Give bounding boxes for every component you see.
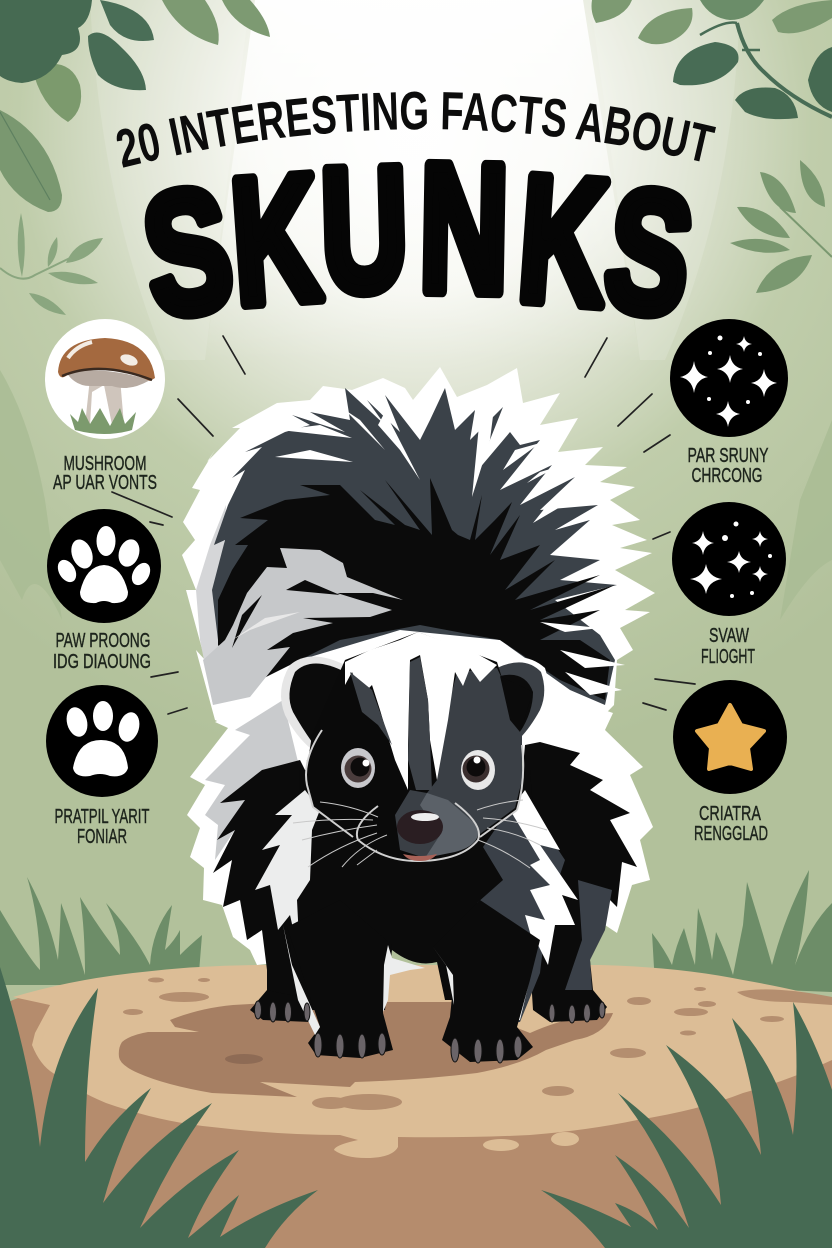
label: stars 1: CHRCONG: [692, 465, 762, 487]
head: ear join right: [500, 676, 533, 732]
body: white streak right: [510, 790, 578, 1020]
claws: [254, 1001, 605, 1063]
head: white crown and stripes: [345, 632, 497, 790]
grass: back left: [0, 877, 202, 985]
icon: stars 1: [670, 319, 788, 437]
label: mushroom: AP UAR VONTS: [53, 472, 157, 494]
tail: left grey edge: [196, 505, 232, 705]
legs: front right: [433, 900, 540, 1062]
label: paw 2: PRATPIL YARIT: [54, 806, 150, 828]
label: paw 2: FONIAR: [77, 826, 127, 848]
body: grey flank: [477, 800, 565, 1023]
head: face base: [305, 632, 523, 860]
label: paw 1: IDG DIAOUNG: [53, 651, 151, 673]
head: right eye: [461, 750, 495, 790]
head: nose and mouth: [397, 810, 443, 861]
label: paw 1: [53, 630, 151, 673]
head: left eye: [341, 748, 375, 788]
legs: front left: [287, 900, 393, 1058]
heading: SKUNKS: S: [133, 151, 243, 354]
label: stars 1: PAR SRUNY: [688, 445, 768, 467]
head: grey centre stripe: [408, 657, 432, 790]
connector lines: [112, 336, 695, 714]
body: white side fur right: [520, 690, 653, 967]
heading: SKUNKS: U: [319, 130, 410, 328]
body: left haunch black: [213, 760, 320, 1000]
head: muzzle ring and jaw: [306, 730, 523, 861]
icon: mushroom: [45, 319, 165, 439]
icon: paw 1: [47, 509, 161, 623]
grass: back right: [652, 870, 832, 992]
head: right grey face: [395, 668, 522, 858]
ground: [0, 965, 832, 1248]
heading: SKUNKS: S: [595, 150, 703, 353]
icon: star: [673, 680, 787, 794]
label: mushroom: [53, 453, 157, 494]
heading: SKUNKS: [133, 126, 703, 354]
tail: white wedges: [275, 400, 567, 523]
label: stars 2: [701, 625, 755, 668]
body: torso black: [290, 770, 545, 1010]
body: grey side fur left: [205, 700, 300, 860]
legs: rear paws: [250, 990, 313, 1022]
heading: SKUNKS: K: [513, 139, 613, 344]
foliage: right sprig: [730, 160, 832, 293]
grass: foreground left: [0, 967, 318, 1248]
head: whiskers: [293, 800, 547, 868]
foliage: top left leaves: [0, 0, 270, 212]
label: mushroom: MUSHROOM: [64, 453, 146, 475]
head: ears: [281, 656, 548, 748]
label: paw 1: PAW PROONG: [56, 630, 150, 652]
label: paw 2: [54, 806, 150, 848]
foliage: top right leaves: [592, 0, 832, 119]
label: star: [694, 803, 768, 845]
body: white chest streak left: [255, 790, 320, 960]
skunk: [182, 367, 655, 1063]
icon: paw 2: [46, 685, 158, 797]
tail: black fur: [218, 478, 615, 700]
foliage: left sprig: [0, 213, 103, 315]
legs: white trim: [283, 925, 454, 1035]
label: star: CRIATRA: [699, 803, 761, 825]
label: stars 2: SVAW: [709, 625, 749, 647]
heading: SKUNKS: K: [226, 138, 326, 343]
heading: SKUNKS: N: [418, 126, 510, 330]
head: grey patch left: [350, 672, 392, 745]
label: stars 2: FLIOGHT: [701, 646, 755, 668]
tail: grey band: [203, 548, 403, 705]
icon: stars 2: [672, 502, 786, 616]
title: 20 INTERESTING FACTS ABOUT: [116, 92, 716, 168]
body: right haunch black: [520, 742, 637, 1022]
head: muzzle: [420, 793, 479, 858]
label: stars 1: [688, 445, 768, 487]
label: star: RENGGLAD: [694, 823, 768, 845]
body: white side fur left: [187, 690, 320, 965]
tail: white outer fur: [182, 367, 655, 760]
tail: dark grey fur: [212, 388, 617, 705]
grass: foreground right: [541, 1002, 832, 1248]
tail: white strands lower right: [540, 622, 625, 695]
